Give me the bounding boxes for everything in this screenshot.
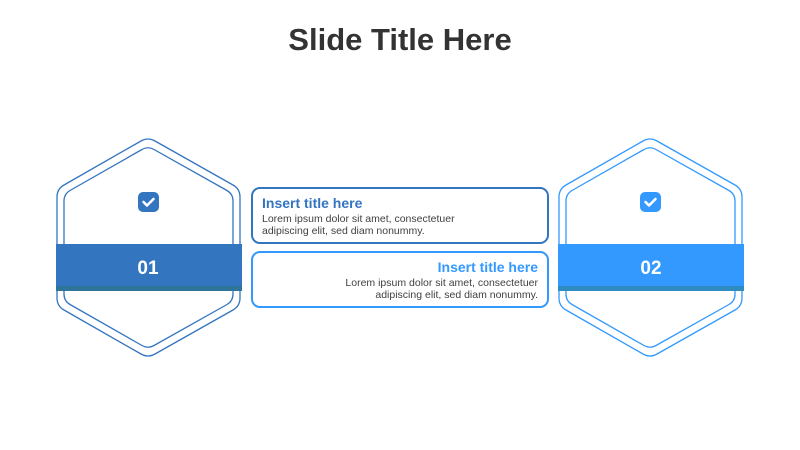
text box 1: Insert title here xyxy=(262,195,362,211)
icon: check 02 xyxy=(640,192,661,212)
text box 1: Lorem ipsum dolor sit amet, consectetuer xyxy=(262,213,455,225)
text box 2 xyxy=(251,251,549,308)
title: Slide Title Here xyxy=(288,22,512,57)
hexagon 02: 02 xyxy=(640,258,662,279)
text box 2: Insert title here xyxy=(438,259,538,275)
text box 1 xyxy=(251,187,549,244)
hexagon 01: 01 xyxy=(137,258,159,279)
text box 2: Lorem ipsum dolor sit amet, consectetuer xyxy=(345,277,538,289)
text box 1: adipiscing elit, sed diam nonummy. xyxy=(262,225,425,237)
text box 2: adipiscing elit, sed diam nonummy. xyxy=(375,289,538,301)
icon: check 01 xyxy=(138,192,159,212)
